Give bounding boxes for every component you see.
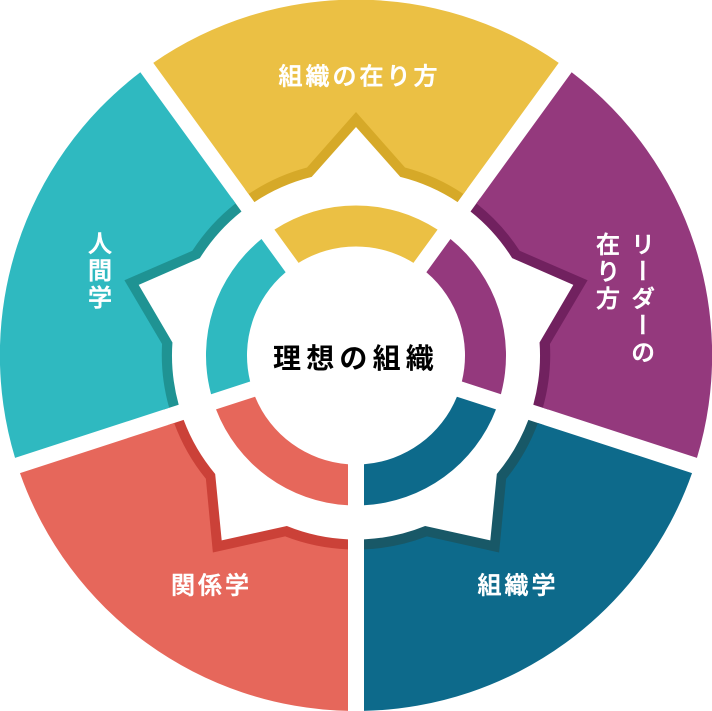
label: リーダーの在り方 — [592, 232, 654, 367]
label: 関係学: 関係学 — [171, 572, 252, 600]
panel: 組織の在り方 (yellow sector) — [153, 0, 559, 202]
label: 人間学: 人間学 — [84, 231, 112, 312]
label: リーダーの在り方: 在り方 — [592, 232, 620, 313]
label: リーダーの在り方: リーダーの — [626, 232, 654, 367]
panel: 組織学 (blue sector) — [364, 420, 692, 711]
sector shape: yellow — [153, 0, 559, 202]
ring segment: purple — [426, 239, 506, 394]
sector shape: purple — [471, 72, 712, 458]
ring segment: yellow — [274, 205, 438, 263]
label: 組織学: 組織学 — [478, 572, 558, 600]
panel: リーダーの在り方 (purple sector) — [471, 72, 712, 458]
sector shape: blue — [364, 420, 692, 711]
ring segment: teal — [206, 239, 286, 394]
label: 組織の在り方: 組織の在り方 — [278, 64, 440, 90]
sector shape: red — [20, 420, 348, 711]
ring segment: red — [216, 397, 348, 505]
panel: 関係学 (red sector) — [20, 420, 348, 711]
sector shape: teal — [0, 72, 241, 458]
panel: 人間学 (teal sector) — [0, 72, 241, 458]
inner ring: five segments — [206, 205, 506, 505]
center title: 理想の組織: 理想の組織 — [273, 343, 439, 374]
ring segment: blue — [364, 397, 496, 505]
